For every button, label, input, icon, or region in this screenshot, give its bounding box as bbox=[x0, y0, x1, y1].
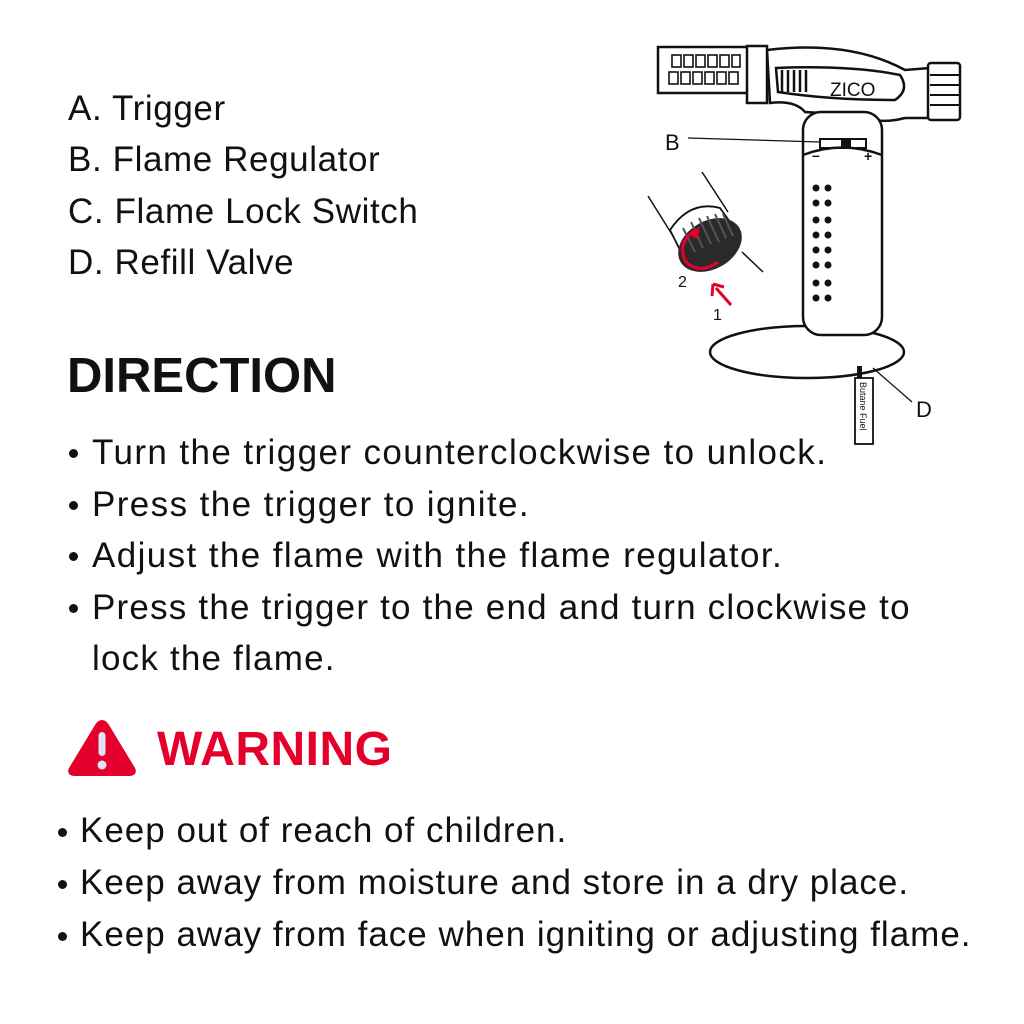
label B: B bbox=[665, 130, 680, 155]
handle: – bbox=[812, 147, 820, 163]
parts list: D. Refill Valve bbox=[68, 243, 294, 282]
parts list: C. Flame Lock Switch bbox=[68, 192, 418, 231]
warning list bbox=[58, 811, 972, 954]
label D with fuel can bbox=[855, 366, 932, 444]
trigger detail with arrows: 2 bbox=[678, 274, 687, 291]
direction steps: Adjust the flame with the flame regulator. bbox=[92, 536, 783, 575]
parts list bbox=[68, 89, 418, 282]
handle: + bbox=[864, 148, 872, 164]
parts list: A. Trigger bbox=[68, 89, 226, 128]
warning list: Keep out of reach of children. bbox=[80, 811, 567, 850]
direction steps: Press the trigger to the end and turn clockwise to bbox=[92, 588, 911, 627]
parts list: B. Flame Regulator bbox=[68, 140, 380, 179]
warning list: Keep away from moisture and store in a dry place. bbox=[80, 863, 909, 902]
heading: warning: WARNING bbox=[157, 723, 392, 776]
trigger detail with arrows: 1 bbox=[713, 307, 722, 324]
label D with fuel can: D bbox=[916, 397, 932, 422]
torch head: ZICO bbox=[830, 80, 875, 101]
icon: warning triangle bbox=[68, 720, 136, 776]
label D with fuel can: Butane Fuel bbox=[858, 382, 868, 431]
handle bbox=[803, 112, 882, 335]
direction steps: Press the trigger to ignite. bbox=[92, 485, 530, 524]
warning list: Keep away from face when igniting or adjusting flame. bbox=[80, 915, 972, 954]
trigger detail with arrows bbox=[648, 172, 763, 324]
direction steps bbox=[69, 433, 911, 678]
base bbox=[710, 326, 904, 378]
direction steps: lock the flame. bbox=[92, 639, 336, 678]
illustration: torch bbox=[647, 44, 962, 445]
torch head bbox=[658, 46, 960, 121]
label B bbox=[665, 130, 820, 155]
direction steps: Turn the trigger counterclockwise to unlock. bbox=[92, 433, 827, 472]
heading: direction: DIRECTION bbox=[67, 349, 336, 403]
